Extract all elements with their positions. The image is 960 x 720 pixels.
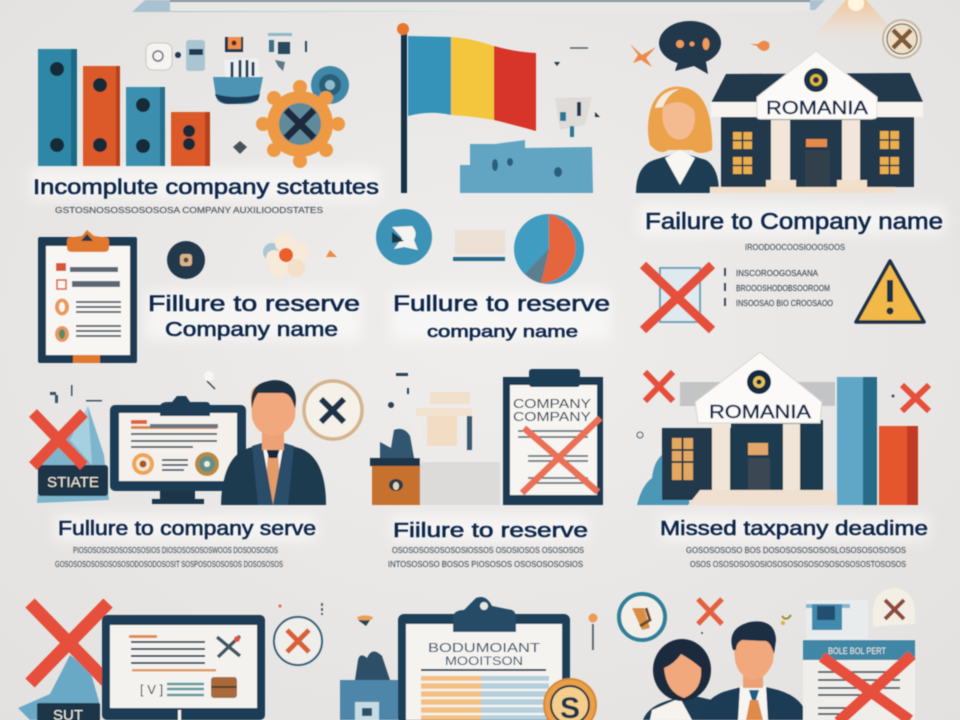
heading: Failure to Company name	[645, 208, 943, 234]
list: INSCOROOGOSAANA	[736, 269, 819, 278]
panel: couple and rejected form	[619, 588, 915, 720]
heading: Fiilure to reserve	[393, 520, 588, 542]
toolbox	[340, 616, 398, 720]
icon: dollar coin	[544, 679, 596, 720]
caption: GOSOSOSOSO BOS DOSOSOSOSOSOSLOSOSOSOSOSOS	[686, 546, 906, 555]
pie chart	[514, 214, 584, 284]
file box	[370, 429, 420, 505]
heading: Fullure to reserve	[393, 291, 610, 316]
small marks	[50, 371, 215, 403]
clipboard document: COMPANY	[513, 397, 592, 411]
caption: INTOSOSOSO BOSOS PIOSOSOS OSOSOSOSOSIOS	[388, 560, 583, 569]
origami and state label: STIATE	[47, 474, 99, 491]
rejected form	[803, 600, 915, 720]
icon: desk strip	[453, 230, 505, 261]
origami	[18, 655, 100, 720]
building	[662, 352, 838, 505]
monitor: [ V ]	[140, 682, 163, 697]
origami and state label	[37, 406, 109, 503]
small marks	[388, 373, 409, 408]
caption: PIOSOSOSOSOSOSOSOSIOS DIOSOSOSOSOSWOOS DOSOOSOSOS	[73, 546, 278, 555]
scattered marks	[554, 48, 600, 137]
panel: company document rejected	[370, 369, 603, 569]
panel: incomplete company statutes	[33, 33, 379, 215]
woman	[636, 87, 719, 193]
caption	[388, 546, 584, 569]
man	[700, 621, 808, 720]
icon: flower	[263, 233, 337, 278]
clipboard document	[503, 369, 603, 505]
list	[725, 268, 833, 308]
heading: Incomplute company sctatutes	[33, 176, 379, 199]
circle x badge	[304, 381, 362, 439]
caption	[686, 546, 906, 569]
city silhouette	[460, 140, 593, 193]
icon: blue badge	[376, 209, 432, 265]
small floating icons	[146, 33, 307, 71]
office desk	[415, 392, 500, 505]
heading: Fullure to company serve	[58, 518, 316, 540]
orange star mark	[630, 44, 656, 67]
small marks	[701, 615, 791, 634]
flag	[408, 36, 536, 131]
caption: OSOSOSOSOSOSOSIOSSOS OSOSIOSOS OSOSOSOS	[392, 546, 584, 555]
panel: missed tax deadline	[637, 352, 929, 569]
clipboard: BODUMOIANT	[428, 640, 540, 655]
icon: orange gear with x	[256, 66, 349, 168]
label	[37, 703, 100, 720]
pin	[588, 614, 598, 650]
speech badge x	[873, 588, 915, 627]
building label: ROMANIA	[709, 402, 811, 422]
building	[710, 51, 923, 193]
heading: Fillure to reserve	[148, 291, 360, 316]
building label: ROMANIA	[766, 98, 868, 118]
icon: document basket	[213, 58, 263, 104]
monitor	[102, 615, 265, 720]
small marks	[637, 394, 894, 438]
red x left	[645, 372, 673, 401]
panel: clipboard checklist	[38, 230, 360, 363]
panel: pie chart	[376, 209, 610, 341]
subheading: company name	[427, 322, 578, 341]
caption: OSOS OSOSOSOSOSIOSOSOSOSOSOSOSOSOSOSTOSOSOS	[690, 560, 906, 569]
panel: state monitor and man	[33, 371, 362, 569]
heading: Missed taxpany deadime	[660, 518, 928, 540]
small marks	[278, 603, 322, 615]
flagpole	[397, 23, 409, 193]
binders chart	[38, 49, 247, 166]
panel: warning list	[643, 261, 924, 330]
bars	[837, 377, 918, 505]
orange leaf	[750, 41, 769, 51]
icon: dark gear	[167, 241, 205, 279]
panel: document and coin	[340, 597, 598, 720]
monitor	[110, 396, 246, 504]
caption	[55, 546, 283, 569]
circle x badge	[883, 20, 921, 58]
red x	[30, 603, 108, 683]
circle x badge	[274, 617, 322, 665]
panel: bottom left monitor	[18, 603, 322, 720]
clipboard	[38, 230, 137, 363]
icon: warning triangle	[856, 261, 924, 322]
clipboard	[398, 597, 570, 720]
top banner	[132, 0, 825, 12]
teal badge	[619, 594, 665, 640]
backdrop blob	[637, 382, 835, 505]
man	[221, 380, 326, 505]
list: BROOOSHODOBSOOROOM	[736, 284, 830, 293]
clipboard: MOOITSON	[445, 654, 523, 668]
red x right	[902, 385, 929, 411]
panel: woman and Romania building	[630, 0, 943, 252]
speech bubble	[659, 21, 721, 74]
caption: IROODOOCOOSIOOOSOOS	[745, 243, 845, 252]
subheading: Company name	[165, 319, 338, 341]
red x	[698, 599, 722, 624]
caption: GOSOSOSOSOSOSOSOSODOSODOSOSIT SOSPOSOSOSOSOS DOSOSOSOS	[55, 560, 283, 569]
panel: romanian flag	[397, 23, 600, 193]
list: INSOOSAO BIO CROOSAOO	[736, 299, 833, 308]
caption: GSTOSNOSOSSOSOSOSA COMPANY AUXILIOODSTATES	[55, 206, 323, 215]
woman	[643, 639, 722, 720]
lamp	[812, 0, 900, 38]
red x	[33, 413, 84, 466]
clipboard document: COMPANY	[513, 410, 592, 424]
red x	[643, 265, 712, 330]
heading halos	[30, 168, 945, 541]
rejected form: BOLE BOL PERT	[828, 646, 886, 656]
